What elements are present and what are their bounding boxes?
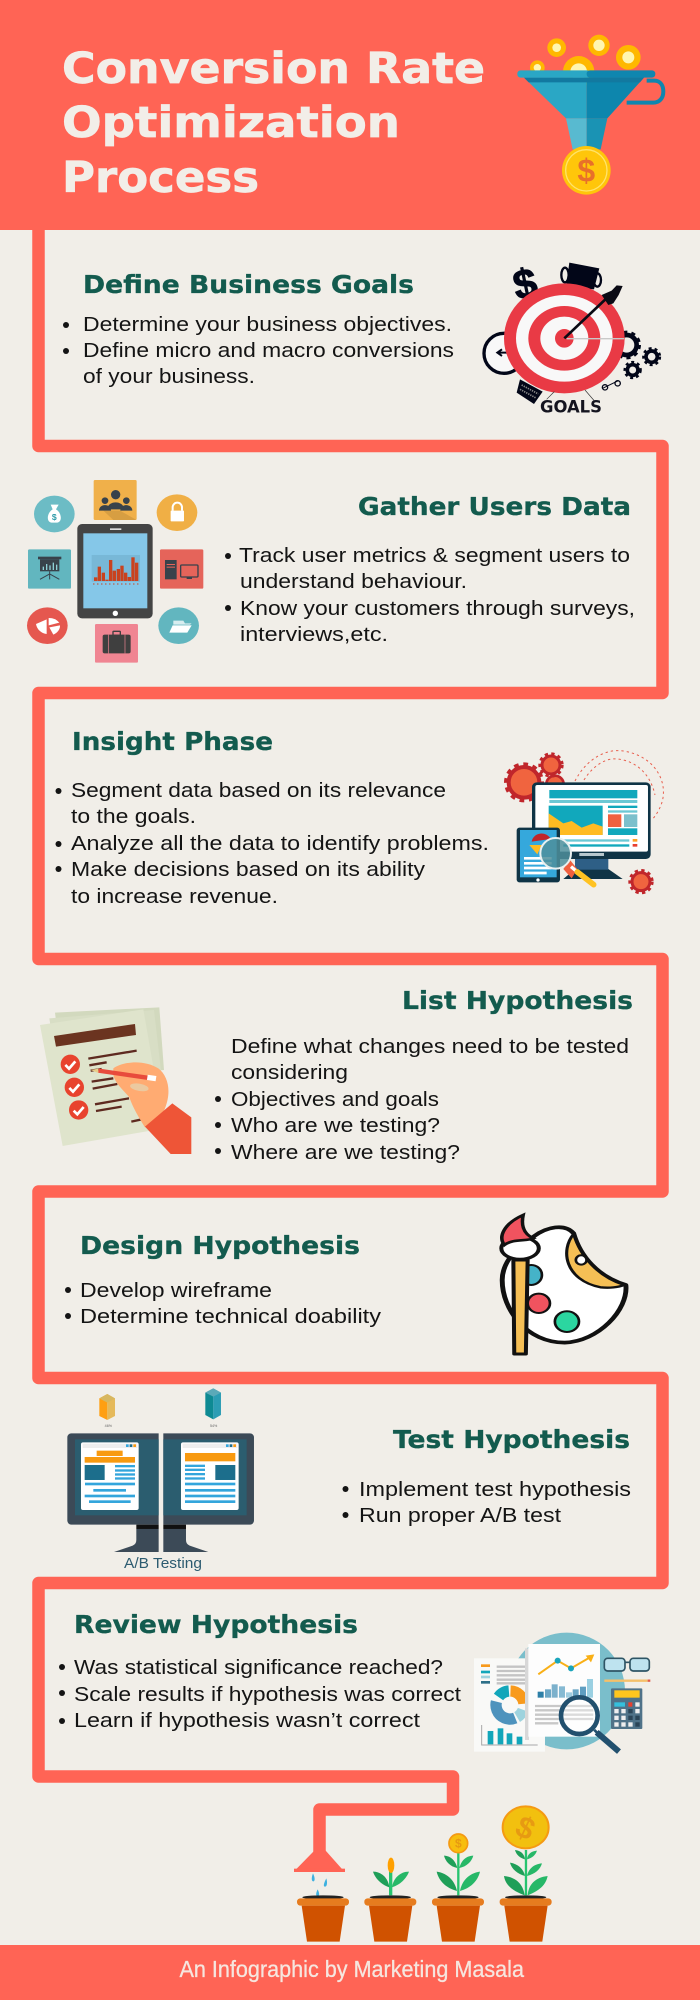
text block: Run proper A/B test (359, 1505, 562, 1527)
text block: Develop wireframe (80, 1280, 272, 1302)
text block: Implement test hypothesis (359, 1479, 631, 1501)
icon: A/B testing monitors: 46% (105, 1424, 113, 1428)
text block: Learn if hypothesis wasn’t correct (74, 1710, 421, 1732)
text block: understand behaviour. (240, 571, 467, 593)
heading: Define Business Goals (83, 270, 414, 299)
panel: test hypothesis (67, 1388, 631, 1572)
text block (56, 780, 489, 908)
title: Process (62, 153, 259, 203)
title: Optimization (62, 98, 400, 148)
icon: monitor, tablet and magnifier (506, 751, 663, 893)
icon: checklist and hand (40, 1007, 191, 1154)
panel: design hypothesis (65, 1215, 626, 1354)
icon: funnel with coins: $ (577, 152, 595, 188)
heading: Test Hypothesis (393, 1425, 630, 1454)
text block (63, 314, 454, 388)
text block: Make decisions based on its ability (71, 859, 425, 881)
footer (0, 1945, 700, 2000)
icon: A/B testing monitors (67, 1388, 254, 1552)
heading: Insight Phase (72, 727, 273, 756)
heading: Gather Users Data (358, 492, 631, 521)
icon: plant with small coin: $ (455, 1837, 462, 1851)
text block: Define micro and macro conversions (83, 340, 454, 362)
text block: Determine technical doability (80, 1306, 381, 1328)
text block: to increase revenue. (71, 886, 278, 908)
icon: plant with small coin (437, 1834, 480, 1895)
panel: insight phase (56, 727, 663, 908)
text block: to the goals. (71, 806, 196, 828)
text block: Objectives and goals (231, 1089, 439, 1111)
title: Conversion Rate (62, 44, 485, 94)
text block: considering (231, 1062, 348, 1084)
text block (342, 1479, 631, 1527)
text block: Define what changes need to be tested (231, 1036, 629, 1058)
footer credit: An Infographic by Marketing Masala (180, 1956, 524, 1982)
text block: of your business. (83, 366, 255, 388)
text block (225, 545, 635, 646)
text block: Scale results if hypothesis was correct (74, 1684, 461, 1706)
text block: Where are we testing? (231, 1142, 460, 1164)
icon: tablet with data tiles (27, 480, 203, 663)
text block: Determine your business objectives. (83, 314, 452, 336)
icon: goals target: GOALS (540, 397, 602, 416)
icon: flower pots (297, 1895, 552, 1942)
caption: A/B testing: A/B Testing (124, 1555, 202, 1572)
heading: Review Hypothesis (74, 1610, 358, 1639)
heading: Design Hypothesis (80, 1231, 360, 1260)
icon: funnel with coins (517, 35, 663, 195)
header band (0, 0, 700, 230)
text block: Segment data based on its relevance (71, 780, 446, 802)
icon: plant with large coin (503, 1806, 549, 1895)
text block (65, 1280, 381, 1328)
text block (59, 1657, 461, 1732)
title (62, 44, 485, 203)
text block: Track user metrics & segment users to (239, 545, 630, 567)
panel: review hypothesis (59, 1610, 650, 1752)
connecting path (38, 225, 662, 1860)
panel: define business goals (63, 258, 660, 416)
panel: gather users data (27, 480, 635, 663)
icon: sprout with bud (373, 1858, 409, 1895)
text block (215, 1036, 629, 1164)
text block: Who are we testing? (231, 1115, 440, 1137)
heading: List Hypothesis (402, 986, 633, 1015)
icon: A/B testing monitors: 54% (210, 1424, 218, 1428)
icon: tablet with data tiles: $ (52, 512, 57, 522)
panel: list hypothesis (40, 986, 633, 1164)
icon: paint palette and brush (501, 1215, 626, 1354)
text block: Was statistical significance reached? (74, 1657, 443, 1679)
icon: goals target (484, 258, 660, 416)
text block: Know your customers through surveys, (240, 598, 635, 620)
illustration: watering money plants (294, 1806, 552, 1942)
text block: Analyze all the data to identify problems. (71, 833, 489, 855)
icon: watering head (294, 1851, 345, 1896)
icon: plant with large coin: $ (510, 1809, 540, 1847)
icon: goals target: $ (509, 258, 541, 309)
icon: reports, magnifier and calculator (474, 1633, 650, 1752)
text block: interviews,etc. (240, 624, 388, 646)
